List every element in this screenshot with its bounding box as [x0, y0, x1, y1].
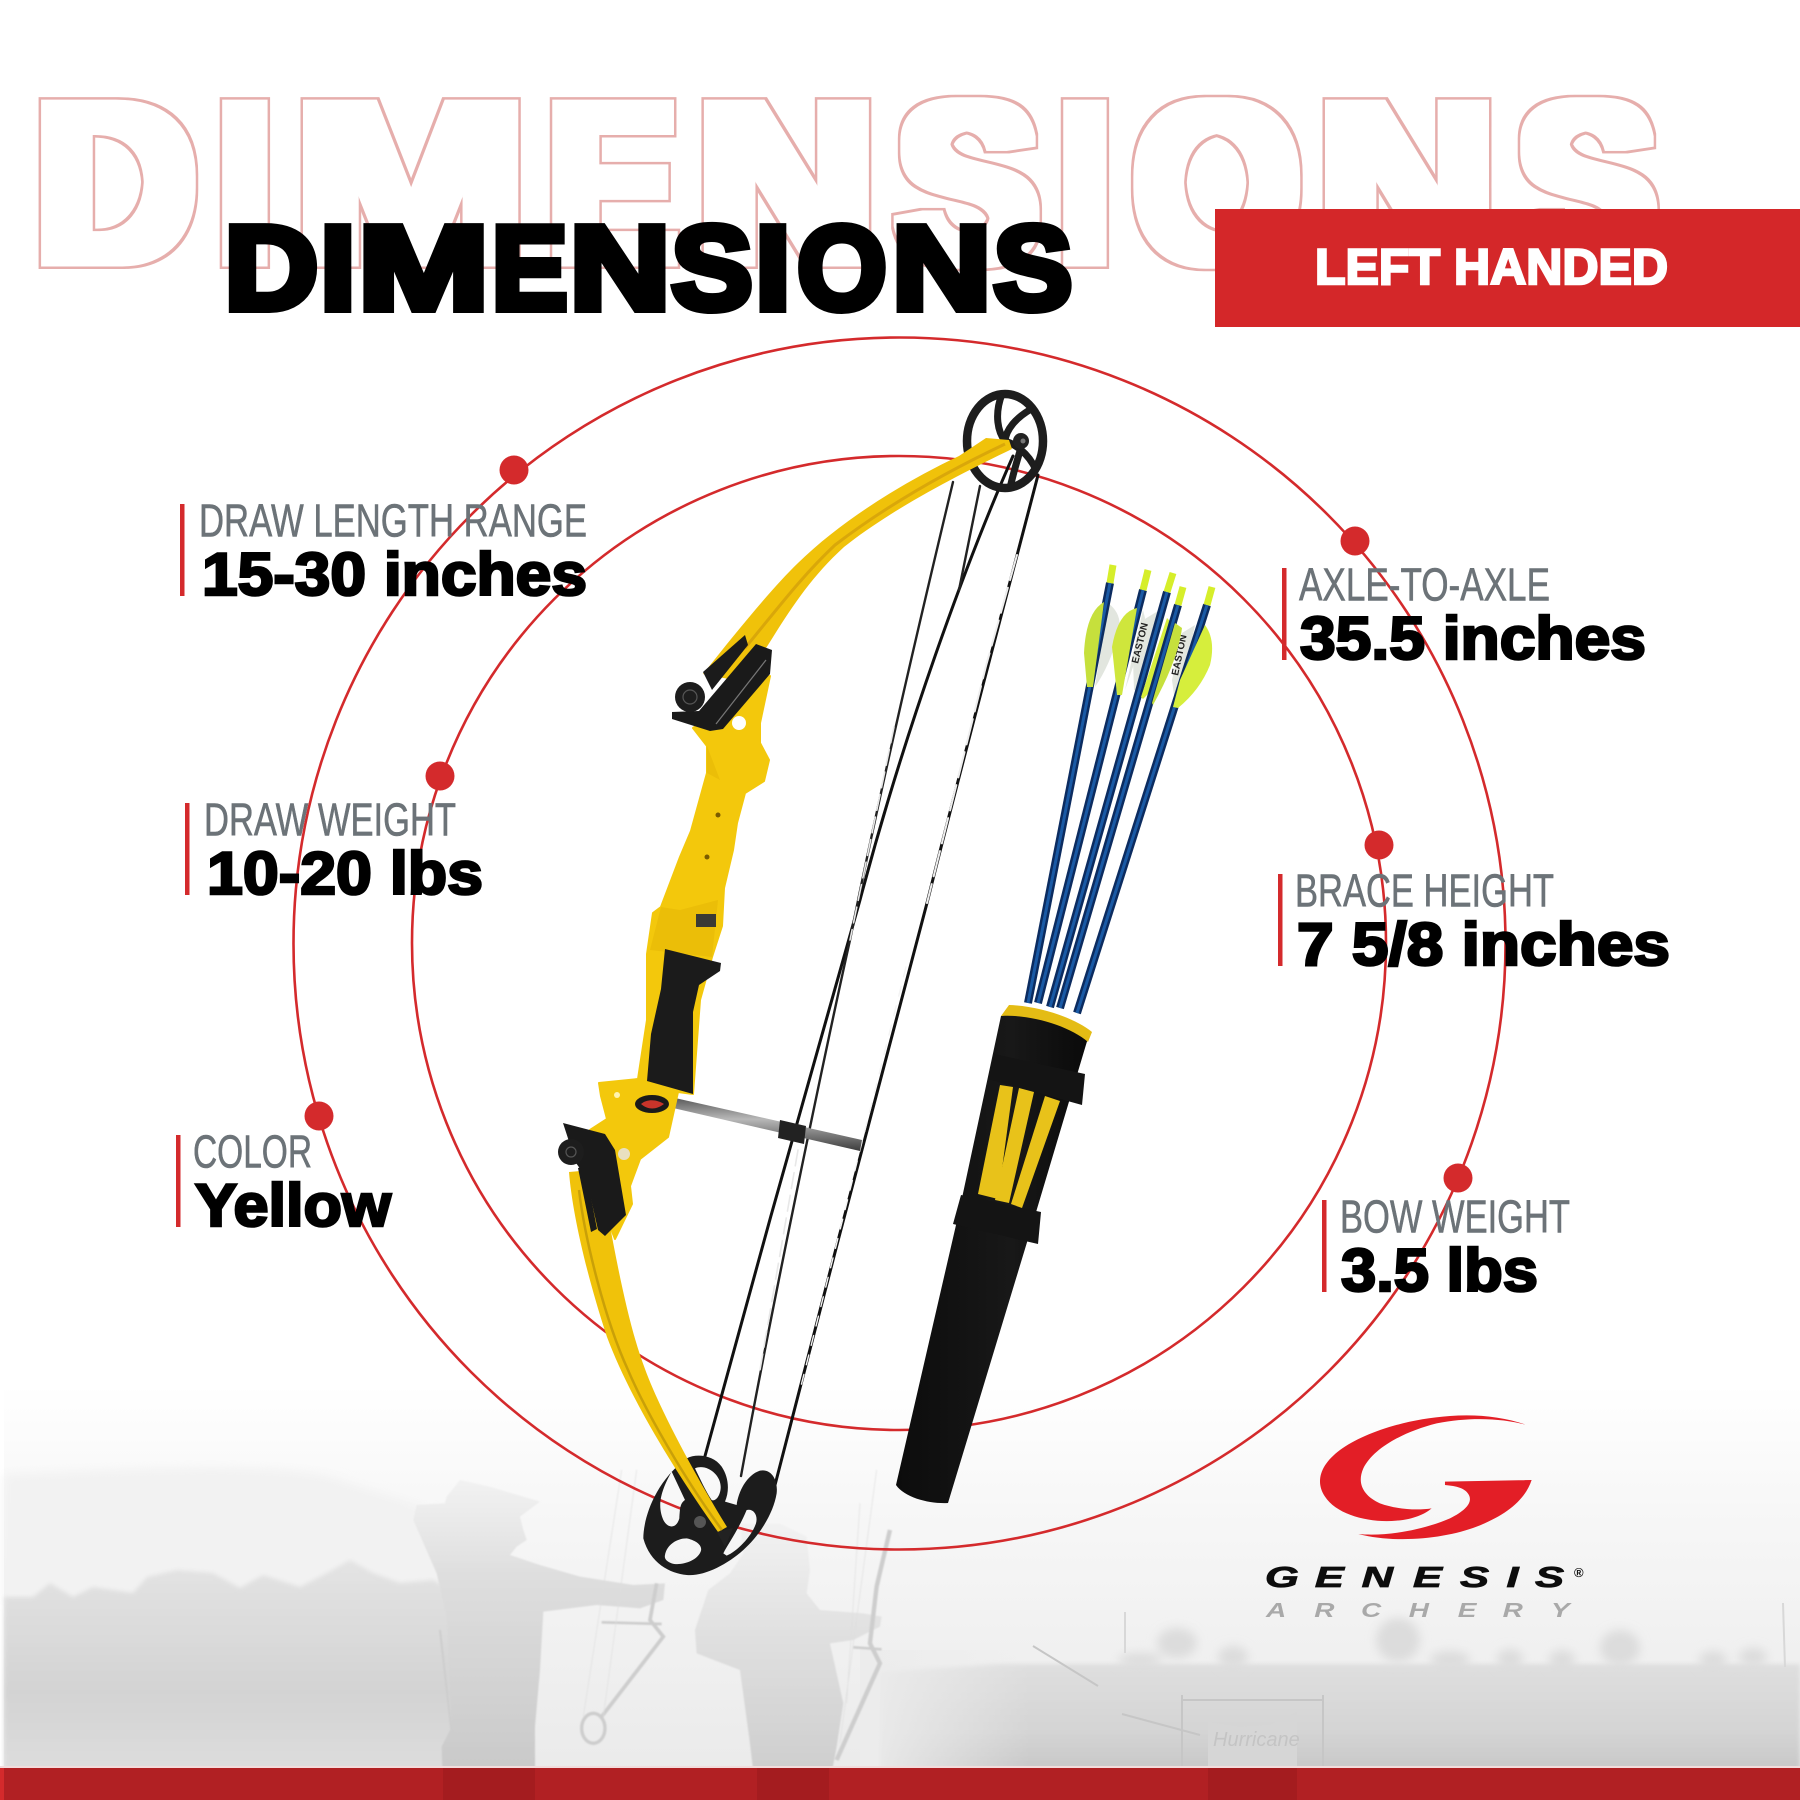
quiver straps: [953, 1054, 1085, 1244]
spec: brace height: BRACE HEIGHT: [1295, 864, 1554, 916]
watermark title outline: N: [1319, 56, 1496, 310]
spec: color: [176, 1126, 391, 1239]
arrow 2: [1038, 570, 1148, 1003]
title: D: [224, 202, 318, 335]
compound bow: [558, 394, 1043, 1575]
watermark title outline: N: [697, 56, 876, 310]
registered mark: ®: [1574, 1565, 1584, 1580]
stabilizer rod: [673, 1098, 862, 1151]
watermark title outline: M: [294, 56, 527, 310]
logo wordmark: GENESIS: [1265, 1561, 1564, 1593]
quiver: [896, 1005, 1092, 1503]
arrows: [1028, 565, 1212, 1013]
upper limb pocket: [672, 635, 772, 731]
spec: draw weight: 10-20 lbs: [207, 840, 483, 907]
upper limb: [703, 438, 1012, 682]
arrow 4: EASTON: [1170, 634, 1190, 677]
lower limb: [569, 1170, 727, 1532]
spec: axle-to-axle: 35.5 inches: [1300, 605, 1646, 672]
watermark title outline: S: [1518, 56, 1656, 310]
arrow 4: [1060, 587, 1195, 1008]
upper axle knob: [1013, 433, 1029, 449]
title: O: [797, 202, 887, 335]
title: I: [755, 202, 791, 335]
title: N: [892, 202, 991, 335]
spec: draw weight: [185, 794, 483, 907]
spec: axle-to-axle: AXLE-TO-AXLE: [1299, 558, 1550, 610]
arrow 3: EASTON: [1130, 622, 1151, 665]
riser: [590, 676, 770, 1239]
background archer silhouettes: [413, 1470, 890, 1800]
quiver yellow webbing: [978, 1085, 1060, 1208]
concentric red rings with marker dots: [294, 338, 1506, 1550]
watermark title outline: I: [220, 56, 269, 310]
spec: color: COLOR: [193, 1126, 312, 1178]
title: N: [570, 202, 670, 335]
quiver yellow rim: [1001, 1005, 1092, 1042]
spec: draw length range: [180, 494, 587, 608]
arrow 1: [1028, 565, 1120, 1003]
lower limb pocket: [558, 1123, 626, 1236]
lower cam axle: [694, 1516, 733, 1547]
logo: Genesis Archery: [1265, 1415, 1584, 1622]
spec: draw length range: DRAW LENGTH RANGE: [199, 494, 587, 546]
arrow 5: [1077, 587, 1212, 1013]
spec: color: Yellow: [195, 1172, 391, 1239]
logo sub-wordmark: ARCHERY: [1265, 1600, 1573, 1622]
watermark title outline: E: [550, 56, 675, 310]
watermark title outline: O: [1135, 56, 1299, 310]
spec: axle-to-axle: [1282, 558, 1646, 672]
bow strings and cables: [705, 456, 1038, 1485]
watermark title outline: I: [1062, 56, 1108, 310]
grip: [647, 949, 721, 1094]
title: M: [358, 202, 489, 335]
logo mark: [1320, 1415, 1532, 1539]
background: misty archery field photo: Hurricane: [1213, 1729, 1300, 1751]
banner: left handed: [1215, 209, 1800, 327]
arrow 3: [1050, 573, 1173, 1007]
title: S: [994, 202, 1072, 335]
lower cam: [643, 1456, 777, 1575]
genesis riser badge: [635, 1095, 669, 1113]
banner: left handed: LEFT HANDED: [1315, 239, 1668, 295]
spec: bow weight: BOW WEIGHT: [1340, 1190, 1570, 1242]
title: S: [671, 202, 753, 335]
watermark title outline: S: [898, 56, 1038, 310]
spec: bow weight: 3.5 lbs: [1341, 1237, 1538, 1304]
upper cam wheel: [967, 394, 1043, 488]
title: E: [492, 202, 568, 335]
spec: draw length range: 15-30 inches: [202, 541, 587, 608]
spec: brace height: 7 5/8 inches: [1297, 911, 1670, 978]
spec: bow weight: [1322, 1190, 1570, 1304]
title: I: [320, 202, 356, 335]
spec: brace height: [1278, 864, 1670, 978]
bottom red band: [0, 1766, 1800, 1800]
watermark title outline: D: [36, 56, 195, 310]
spec: draw weight: DRAW WEIGHT: [204, 794, 456, 846]
